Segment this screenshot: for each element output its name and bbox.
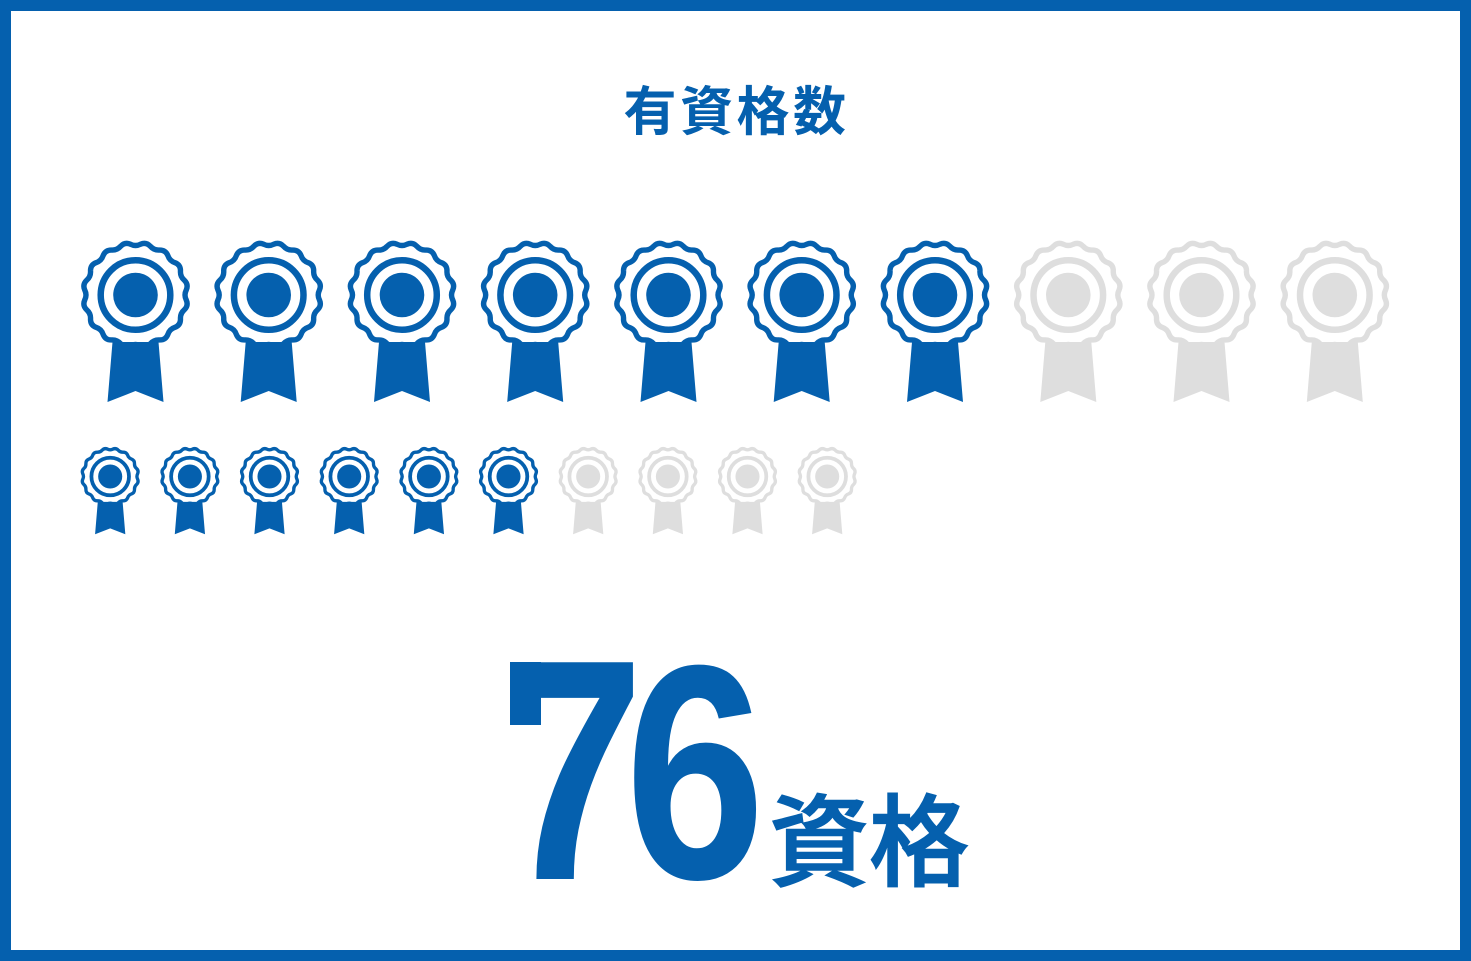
big number 76 bbox=[499, 595, 765, 946]
unit label: 資格 bbox=[769, 788, 969, 900]
row of ten large rosettes: 7 filled, 3 grey bbox=[84, 243, 1386, 402]
row of ten small rosettes: 6 filled, 4 grey bbox=[82, 449, 855, 534]
big number 76: 7 bbox=[499, 595, 644, 946]
title: 有資格数 bbox=[624, 83, 850, 142]
big number 76: 6 bbox=[625, 602, 765, 943]
